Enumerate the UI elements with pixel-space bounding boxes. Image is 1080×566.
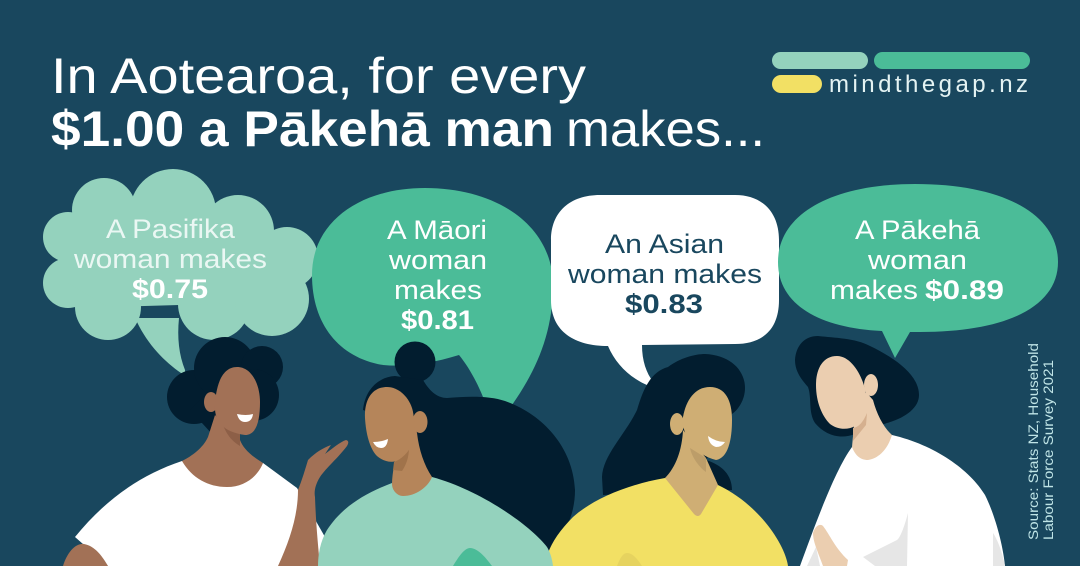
speech bubble: Asian: woman makes (567, 259, 762, 289)
title: $1.00 a Pākehā man (51, 101, 554, 157)
title (51, 48, 765, 157)
figure: Pasifika woman (63, 337, 348, 566)
figure: Māori woman face and top (318, 387, 553, 566)
speech bubble: Asian (551, 195, 779, 387)
logo: mindthegap.nz (772, 52, 1030, 98)
speech bubble: Pasifika: woman makes (73, 244, 267, 274)
speech bubble: Asian: $0.83 (625, 289, 703, 319)
speech bubble: Pasifika (43, 169, 318, 374)
speech bubble: Māori: A Māori (387, 215, 487, 245)
speech bubble: Pākehā: $0.89 (925, 275, 1004, 305)
figure: Pākehā woman (795, 336, 1005, 566)
speech bubble: Pasifika: $0.75 (132, 274, 208, 304)
title: makes... (566, 101, 765, 157)
source note (1025, 343, 1056, 540)
speech bubble: Pasifika: A Pasifika (106, 214, 236, 244)
source note: Labour Force Survey 2021 (1040, 360, 1056, 540)
speech bubble: Pākehā: woman (867, 245, 967, 275)
speech bubble: Māori: woman (388, 245, 487, 275)
logo: mindthegap.nz: mindthegap.nz (829, 71, 1028, 98)
speech bubble: Asian: An Asian (605, 229, 724, 259)
speech bubble: Pākehā: A Pākehā (855, 215, 981, 245)
speech bubble: Māori: $0.81 (401, 305, 474, 335)
speech bubble: Māori (312, 188, 553, 405)
figure: Asian woman (548, 354, 788, 566)
title: In Aotearoa, for every (51, 48, 586, 104)
figure: Māori woman hair (363, 342, 575, 552)
source note: Source: Stats NZ, Household (1025, 343, 1041, 540)
speech bubble: Māori: makes (394, 275, 482, 305)
speech bubble: Pākehā (778, 184, 1058, 358)
speech bubble: Pākehā: makes (830, 275, 918, 305)
